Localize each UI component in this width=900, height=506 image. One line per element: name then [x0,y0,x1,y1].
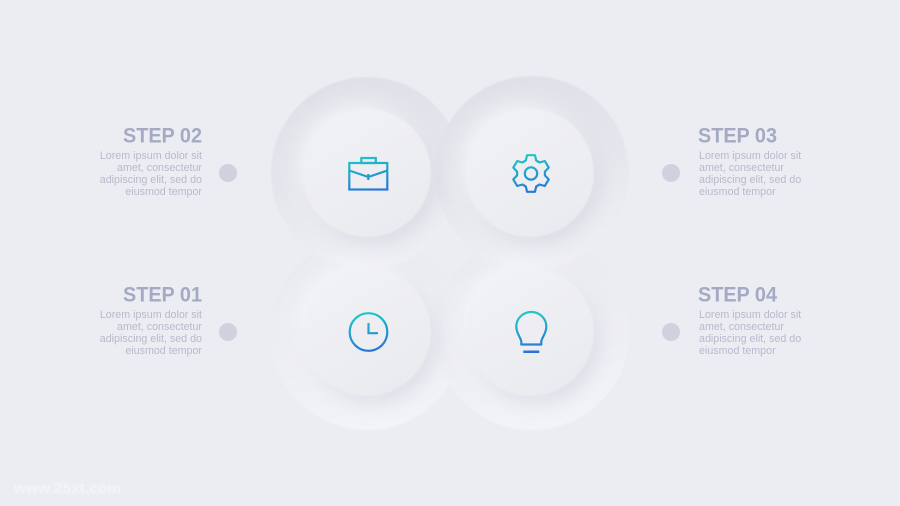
text block: step 01: adipiscing elit, sed do [100,333,202,345]
text block: step 01: eiusmod tempor [125,345,202,357]
text block: step 04: adipiscing elit, sed do [699,333,801,345]
panel: step 02 disc [303,109,431,237]
panel: bottom left outer ring [270,236,464,430]
text block: step 04: eiusmod tempor [699,345,776,357]
text block: step 01: amet, consectetur [117,321,202,333]
text block: step 01 [100,284,202,357]
marker dot: step 03 [662,164,680,182]
text block: step 04: Lorem ipsum dolor sit [699,309,801,321]
text block: step 02: amet, consectetur [117,162,202,174]
panel: bottom right outer ring [435,236,629,430]
marker dot: step 01 [219,323,237,341]
text block: step 03: eiusmod tempor [699,186,776,198]
text block: step 04: STEP 04 [698,284,777,306]
text block: step 02 [100,124,202,198]
panel: top right outer ring [435,76,629,270]
disc highlights [299,104,582,383]
icon: clock [350,313,387,351]
text block: step 02: Lorem ipsum dolor sit [100,150,202,162]
panel: step 04 disc [466,268,594,396]
text block: step 03: STEP 03 [698,124,777,148]
text block: step 04 [698,284,801,357]
panel: top left outer ring [271,77,463,269]
text block: step 02: STEP 02 [123,124,202,148]
icon: briefcase [349,158,387,190]
text block: step 01: Lorem ipsum dolor sit [100,309,202,321]
marker dot: step 02 [219,164,237,182]
marker dot: step 04 [662,323,680,341]
text block: step 03 [698,124,801,198]
text block: step 04: amet, consectetur [699,321,784,333]
text block: step 01: STEP 01 [123,284,202,306]
watermark: www.25xt.com [13,480,121,497]
icon: light bulb [516,312,546,352]
panel: step 03 disc [466,109,594,237]
panel: step 01 disc [303,268,431,396]
text block: step 02: adipiscing elit, sed do [100,174,202,186]
disc shadows [311,119,598,402]
icon: gear [513,155,549,192]
text block: step 03: adipiscing elit, sed do [699,174,801,186]
text block: step 02: eiusmod tempor [125,186,202,198]
text block: step 03: Lorem ipsum dolor sit [699,150,801,162]
text block: step 03: amet, consectetur [699,162,784,174]
